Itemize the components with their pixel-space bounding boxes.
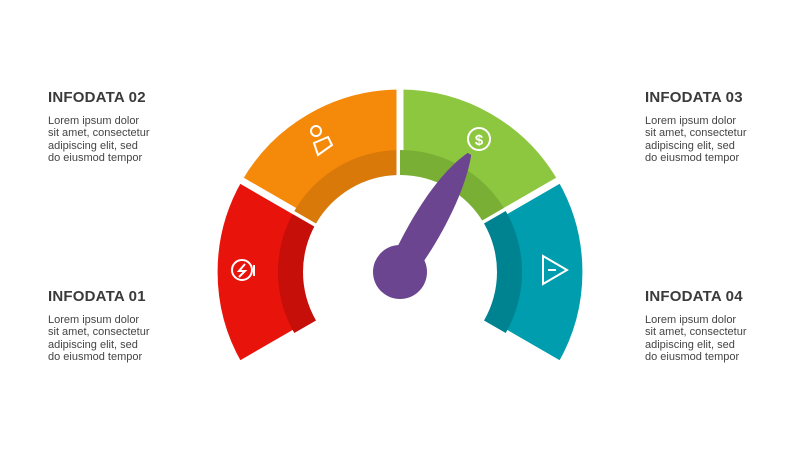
text block: INFODATA 03: do eiusmod tempor (645, 152, 739, 164)
text block: INFODATA 04: sit amet, consectetur (645, 326, 746, 338)
text block: INFODATA 02: sit amet, consectetur (48, 127, 150, 139)
text block: INFODATA 01: INFODATA 01 (48, 288, 146, 305)
text block: INFODATA 04: INFODATA 04 (645, 288, 743, 305)
text block: INFODATA 02: do eiusmod tempor (48, 152, 142, 164)
text block: INFODATA 02: INFODATA 02 (48, 89, 146, 106)
icon: play flag (543, 256, 567, 284)
text block: INFODATA 03: adipiscing elit, sed (645, 140, 735, 152)
segment: red (214, 179, 316, 365)
text block: INFODATA 01: adipiscing elit, sed (48, 339, 138, 351)
text block: INFODATA 01: sit amet, consectetur (48, 326, 150, 338)
segment: teal (484, 179, 586, 365)
text block: INFODATA 03: Lorem ipsum dolor (645, 115, 736, 127)
text block: INFODATA 02: Lorem ipsum dolor (48, 115, 139, 127)
text block: INFODATA 04: adipiscing elit, sed (645, 339, 735, 351)
text block: INFODATA 02 (48, 89, 150, 164)
text block: INFODATA 02: adipiscing elit, sed (48, 140, 138, 152)
text block: INFODATA 03 (645, 89, 746, 164)
icon: bolt bulb (232, 260, 254, 280)
text block: INFODATA 04: Lorem ipsum dolor (645, 314, 736, 326)
text block: INFODATA 03: sit amet, consectetur (645, 127, 746, 139)
text block: INFODATA 04 (645, 288, 746, 363)
text block: INFODATA 01: Lorem ipsum dolor (48, 314, 139, 326)
segment: orange (239, 86, 400, 224)
text block: INFODATA 03: INFODATA 03 (645, 89, 743, 106)
needle (373, 146, 484, 299)
icon: person (311, 126, 332, 155)
segment: green (400, 86, 561, 224)
text block: INFODATA 01 (48, 288, 150, 363)
text block: INFODATA 04: do eiusmod tempor (645, 351, 739, 363)
icon: dollar (468, 128, 490, 150)
text block: INFODATA 01: do eiusmod tempor (48, 351, 142, 363)
icon: dollar: $ (475, 132, 484, 149)
